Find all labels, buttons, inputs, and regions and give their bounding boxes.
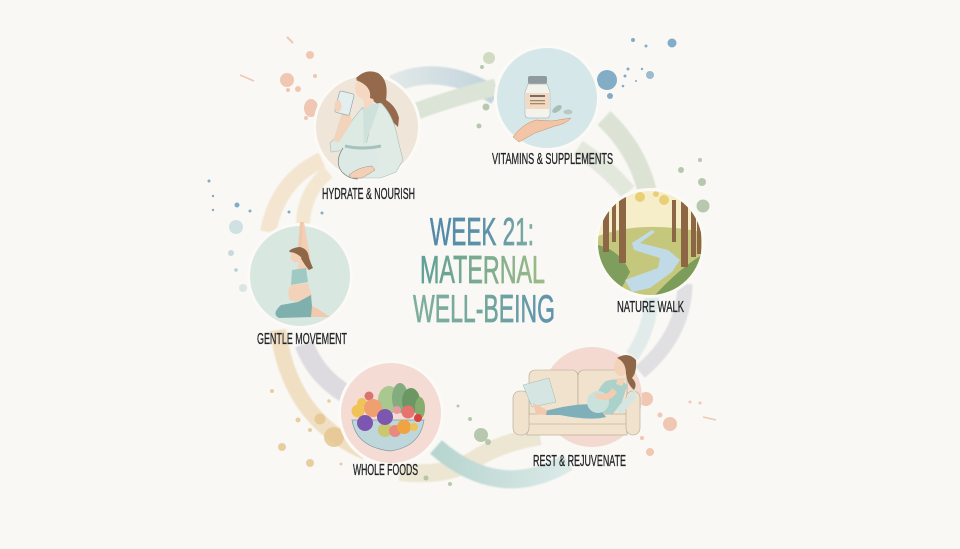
step: Vitamins & Supplements [492,45,613,168]
splatter: ochre [270,389,362,467]
step: Whole Foods [338,360,444,479]
title [413,211,555,331]
title: WEEK 21: [430,211,534,254]
ring of watercolour bands [268,75,685,479]
icon: vitamin bottle and hand [513,76,572,142]
badge disc [494,45,600,151]
splatter: coral [240,37,716,456]
label: HYDRATE & NOURISH [322,186,415,203]
label: WHOLE FOODS [353,462,418,479]
step: Nature Walk [595,188,705,316]
badge disc [595,188,705,298]
badge disc [313,73,421,181]
icon: woman resting on sofa [513,355,640,435]
title: WELL-BEING [413,288,555,331]
icon: forest stream scene [598,191,702,295]
title: MATERNAL [420,249,545,292]
paint splatters [208,37,716,486]
label: GENTLE MOVEMENT [257,331,347,348]
icon: salad bowl [352,383,425,451]
step: Gentle Movement [247,222,353,348]
badge disc [338,360,444,466]
label: REST & REJUVENATE [533,453,626,470]
badge disc [247,223,353,329]
label: VITAMINS & SUPPLEMENTS [492,151,613,168]
icon: seated yoga pose [275,222,330,318]
splatter: blue [208,38,676,292]
step: Rest & Rejuvenate [513,347,642,470]
step: Hydrate & Nourish [313,71,421,203]
label: NATURE WALK [617,299,684,316]
icon: pregnant woman drinking water [330,71,403,179]
splatter: green [424,52,710,486]
badge disc [542,347,642,447]
